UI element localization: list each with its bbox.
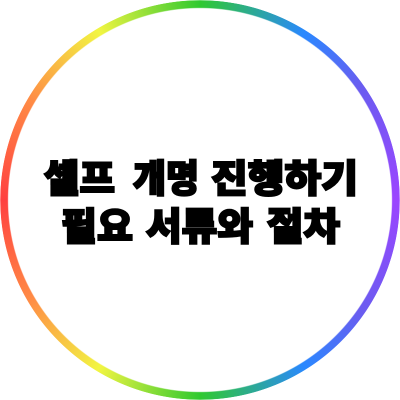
title line 2 <box>61 196 340 251</box>
title line 1: 셀프 <box>44 148 115 203</box>
title line 2: 서류와 <box>146 196 253 251</box>
title line 1: 개명 <box>133 148 199 203</box>
title line 1: 진행하기 <box>211 148 358 203</box>
title line 1 <box>44 148 358 203</box>
title line 2: 필요 <box>61 196 133 251</box>
title line 2: 절차 <box>267 196 340 251</box>
